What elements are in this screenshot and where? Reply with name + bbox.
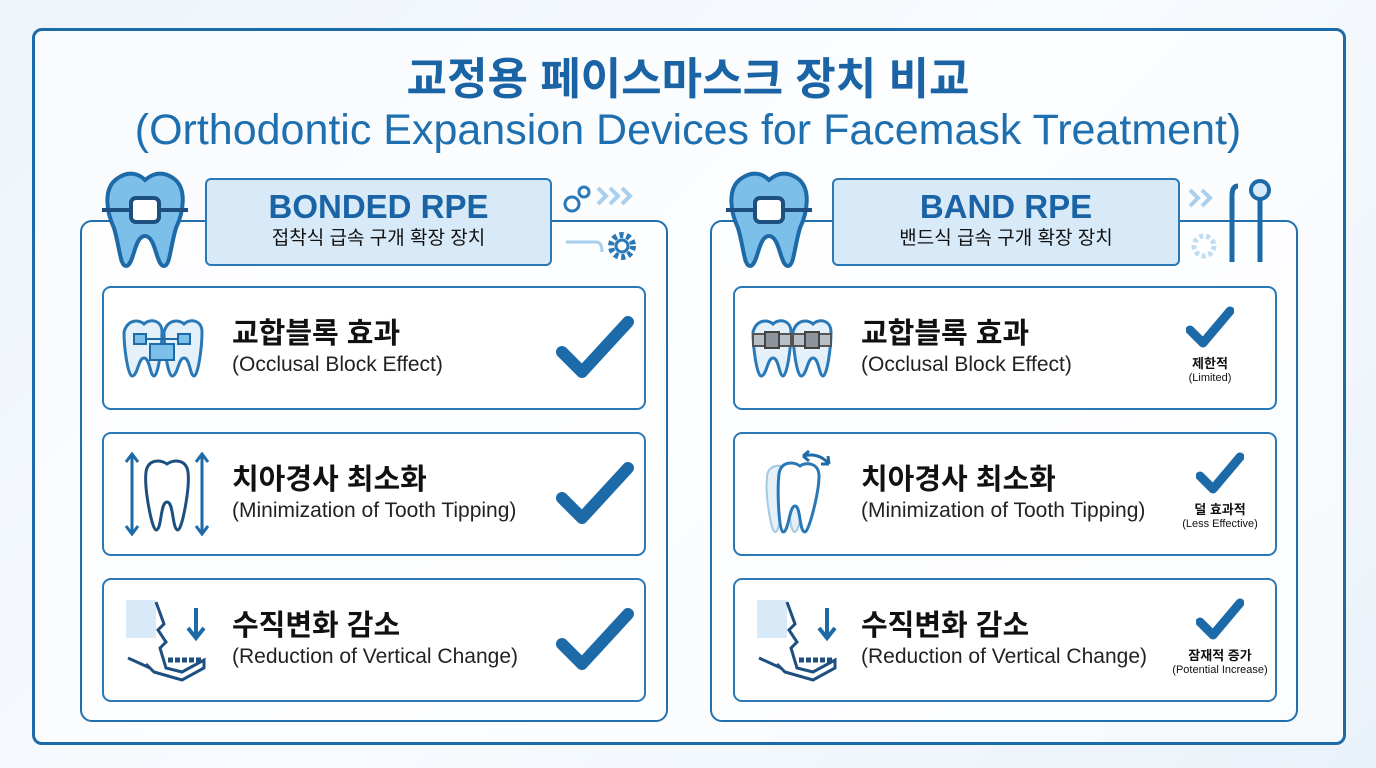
text: 수직변화 감소 [861,610,1029,642]
status: less effective: 덜 효과적 [1194,502,1246,517]
icon: check [556,462,634,524]
icon: tooth arrows [124,452,210,536]
text: (Reduction of Vertical Change) [232,645,518,668]
subtitle: (Orthodontic Expansion Devices for Facemask Treatment) [135,106,1241,154]
text [861,610,1147,668]
row: vertical right [733,578,1277,702]
icon: banded teeth [752,319,832,378]
icon: jaw [757,600,836,682]
header: bonded RPE: BONDED RPE [268,188,489,225]
row: tipping right [733,432,1277,556]
status: less effective: (Less Effective) [1182,518,1258,530]
icon: gears left [564,186,636,260]
text: (Occlusal Block Effect) [232,353,443,376]
status: limited: 제한적 [1192,356,1228,371]
text [232,464,516,522]
icon: dental tools [1188,179,1271,262]
text: (Occlusal Block Effect) [861,353,1072,376]
text: (Minimization of Tooth Tipping) [232,499,516,522]
header: bonded RPE: 접착식 급속 구개 확장 장치 [272,228,485,249]
text: 치아경사 최소화 [861,464,1056,496]
text [861,464,1145,522]
text: 치아경사 최소화 [232,464,427,496]
text [232,318,443,376]
icon: check [556,608,634,670]
header: band RPE: BAND RPE [920,188,1092,225]
row: vertical left [102,578,646,702]
status: potential increase: (Potential Increase) [1172,664,1268,676]
text [861,318,1072,376]
panel: band RPE [710,220,1298,722]
status: limited: (Limited) [1189,372,1231,384]
text: (Minimization of Tooth Tipping) [861,499,1145,522]
status: potential increase: 잠재적 증가 [1188,648,1252,663]
status: potential increase [1172,598,1268,676]
icon: tooth with bracket left [102,172,188,268]
row: tipping left [102,432,646,556]
text: 교합블록 효과 [861,318,1029,350]
text: 수직변화 감소 [232,610,400,642]
icon: tipping tooth [766,450,830,534]
header: bonded RPE [205,178,552,266]
text: 교합블록 효과 [232,318,400,350]
title: 교정용 페이스마스크 장치 비교 [407,55,969,104]
header: band RPE [832,178,1180,266]
icon: jaw [126,600,206,682]
text: (Reduction of Vertical Change) [861,645,1147,668]
row: occlusal block left [102,286,646,410]
text [232,610,518,668]
status: limited [1186,306,1234,384]
status: less effective [1182,452,1258,530]
header: band RPE: 밴드식 급속 구개 확장 장치 [899,228,1113,249]
icon: two teeth block [122,319,204,378]
panel: bonded RPE [80,220,668,722]
icon: tooth with bracket right [726,172,812,268]
row: occlusal block right [733,286,1277,410]
icon: check [556,316,634,378]
